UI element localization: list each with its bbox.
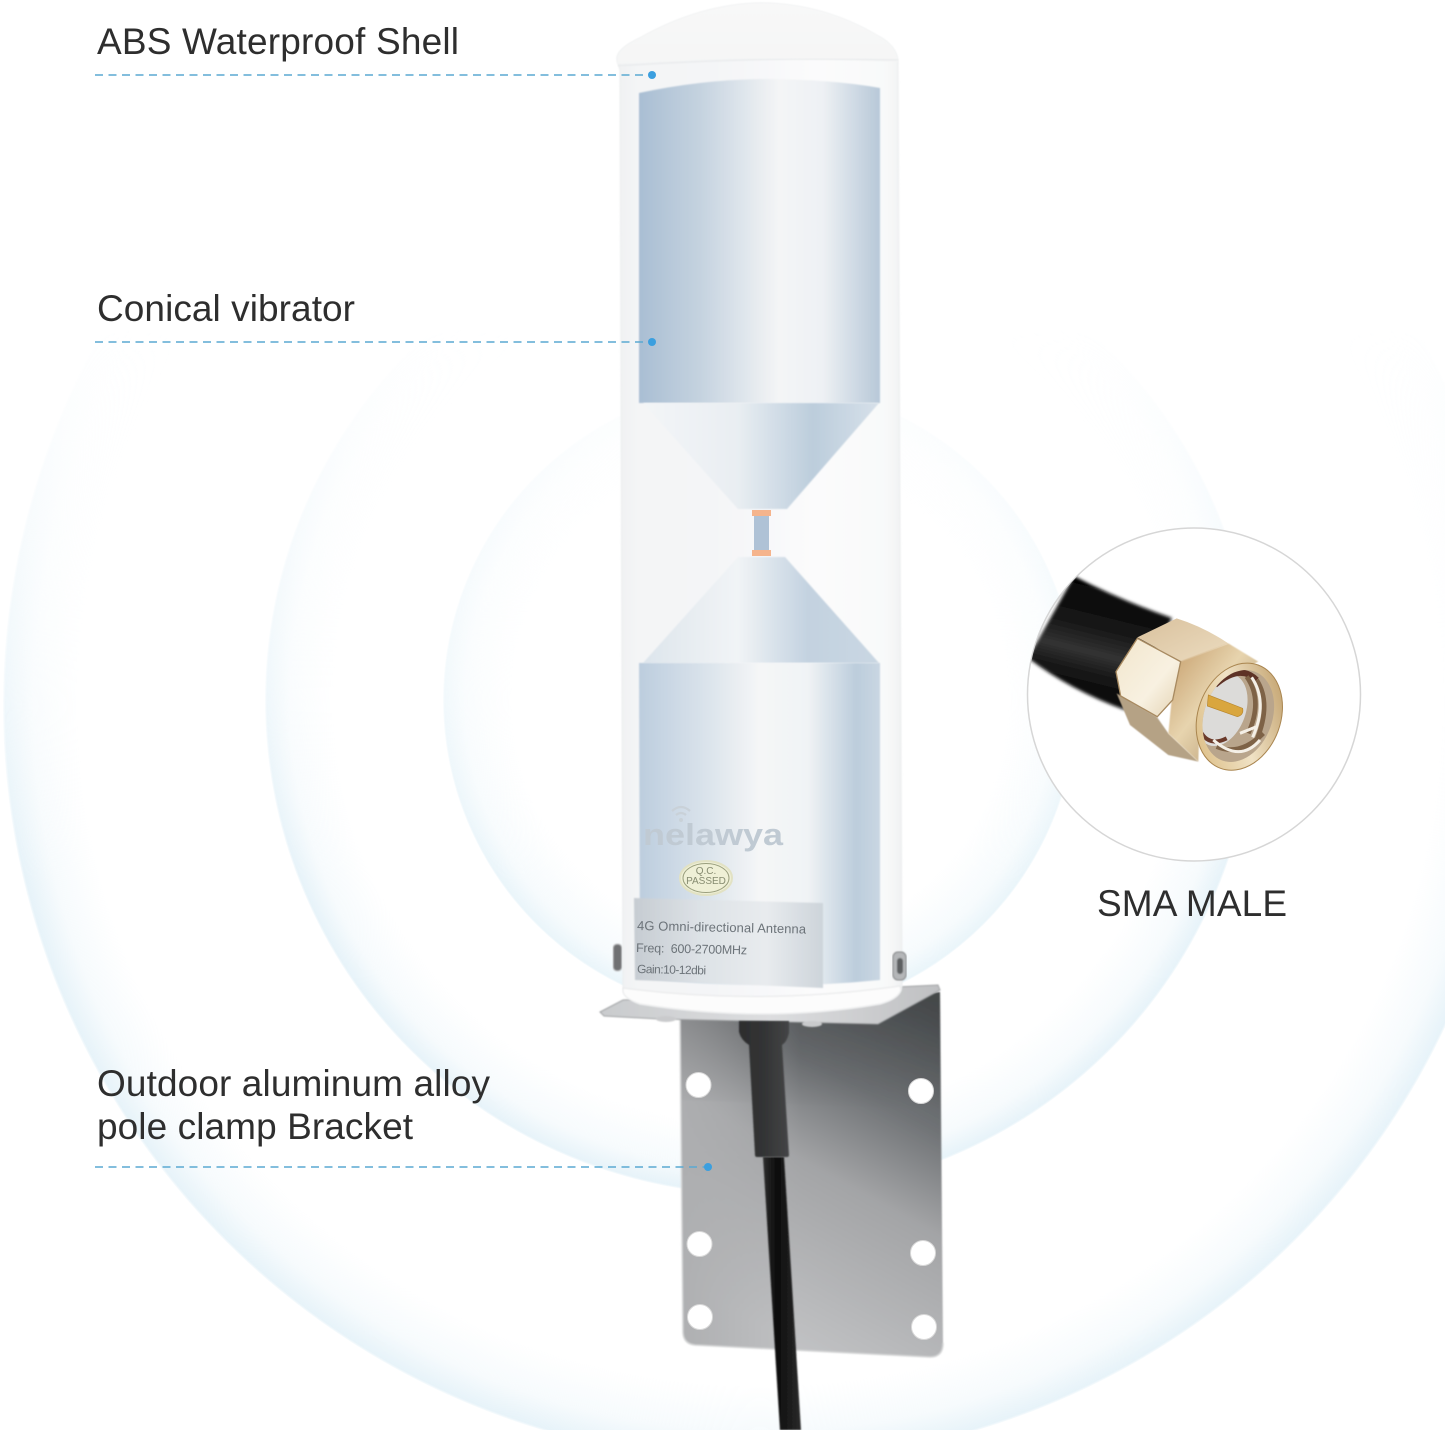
feed tube — [754, 515, 769, 551]
connector body — [1115, 618, 1283, 771]
screw left — [613, 944, 622, 971]
shell dome cap — [617, 3, 898, 64]
lower radiator cylinder — [639, 663, 880, 986]
callout: Conical vibrator: Conical vibrator — [97, 288, 355, 329]
bracket plate — [680, 992, 943, 1357]
QC passed sticker: Q.C. — [696, 866, 716, 877]
shell bottom rim — [623, 986, 901, 1014]
background: signal rings — [4, 529, 1445, 1430]
callout: ABS Waterproof Shell — [95, 21, 656, 79]
centre pin — [1207, 695, 1243, 717]
antenna body — [613, 3, 906, 1014]
shell seam — [618, 59, 898, 66]
upper radiator cylinder — [639, 79, 880, 403]
mounting holes — [686, 1072, 936, 1340]
callout: ABS Waterproof Shell: ABS Waterproof Shell — [97, 21, 459, 62]
callout: Outdoor aluminum alloy pole clamp Bracket: Outdoor aluminum alloy — [97, 1063, 490, 1104]
feed solder top — [752, 510, 771, 516]
radome shell — [617, 3, 902, 1014]
collar — [1168, 643, 1258, 762]
lower cone — [643, 557, 879, 663]
coaxial cable — [763, 1157, 801, 1430]
feed solder bottom — [752, 550, 771, 556]
callout: Conical vibrator — [95, 288, 656, 346]
bracket flange — [600, 985, 940, 1027]
bracket with cable — [600, 985, 943, 1430]
front hex face — [1116, 638, 1181, 717]
spec label — [634, 898, 823, 988]
brand logo — [643, 807, 784, 852]
callout: Outdoor aluminum alloy pole clamp Bracket: pole clamp Bracket — [97, 1106, 414, 1147]
barrel bore — [1202, 670, 1274, 762]
spec label: Freq: 600-2700MHz — [636, 941, 747, 957]
lower hex facets — [1117, 693, 1198, 762]
upper cone — [643, 403, 879, 509]
cable strain relief boot — [739, 1021, 789, 1157]
spec label: 4G Omni-directional Antenna — [637, 918, 807, 937]
screw right — [893, 952, 906, 980]
inset: SMA male connector — [1028, 528, 1360, 861]
barrel rim — [1182, 651, 1297, 782]
brand logo: nelawya — [643, 817, 784, 852]
QC passed sticker — [680, 861, 732, 895]
connector cable — [1028, 576, 1172, 710]
spec label: Gain:10-12dbi — [637, 962, 706, 977]
label: SMA MALE: SMA MALE — [1097, 883, 1287, 924]
callout: Outdoor aluminum alloy pole clamp Bracket — [95, 1063, 712, 1171]
QC passed sticker: PASSED — [686, 876, 726, 887]
upper hex facet — [1137, 618, 1228, 662]
